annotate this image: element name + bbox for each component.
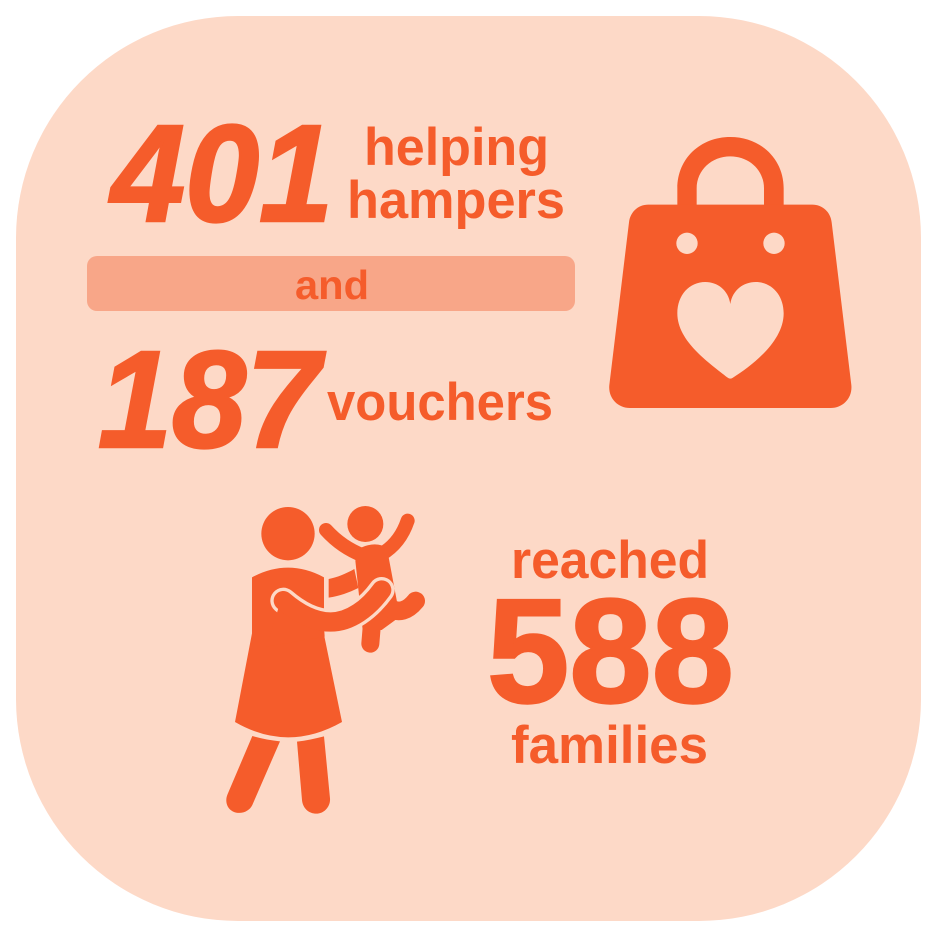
number: 187: 187 — [98, 322, 326, 477]
child right arm — [382, 521, 408, 554]
child left arm — [326, 530, 363, 556]
child head — [347, 506, 383, 542]
stat: reached 588 families — [487, 531, 734, 775]
icon: shopping bag with heart — [609, 137, 851, 408]
number: 401: 401 — [108, 96, 333, 251]
child lower leg — [370, 623, 372, 644]
label: families: families — [511, 716, 708, 775]
label: reached: reached — [511, 531, 709, 590]
parent head — [261, 507, 315, 560]
icon: parent lifting child — [226, 506, 416, 814]
connector bar: and: and — [295, 262, 369, 308]
number: 588: 588 — [487, 569, 734, 734]
parent far arm — [329, 569, 358, 598]
parent dress — [235, 568, 342, 737]
label: hampers: hampers — [347, 171, 565, 230]
parent near arm — [283, 590, 382, 622]
dress patch under arm — [267, 608, 325, 647]
child torso — [355, 544, 400, 630]
label: helping: helping — [364, 118, 549, 177]
stat: 187 vouchers — [98, 322, 553, 477]
child raised leg — [390, 601, 416, 611]
parent arm halo — [283, 590, 382, 622]
label: vouchers: vouchers — [327, 373, 553, 432]
stat: 401 helping hampers — [108, 96, 565, 251]
parent legs — [226, 736, 280, 813]
connector bar: and — [87, 256, 575, 311]
